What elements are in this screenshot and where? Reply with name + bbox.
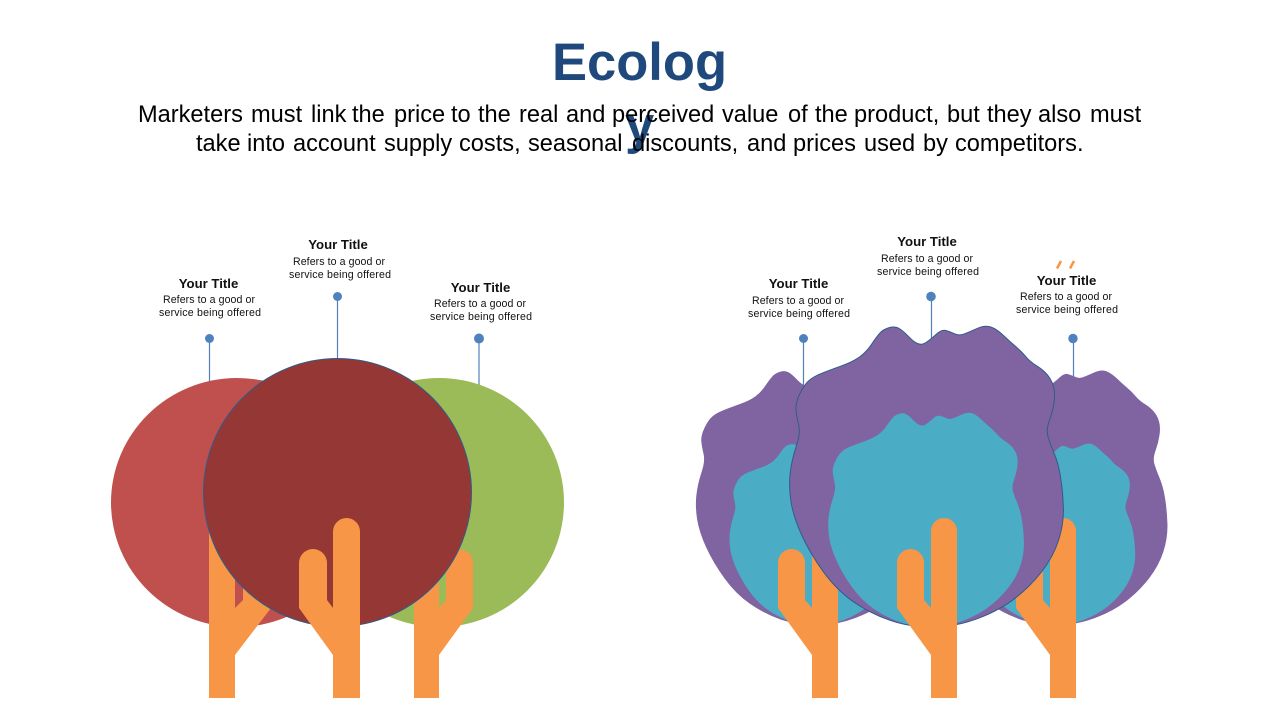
label: left round tree: Your Title — [179, 276, 238, 291]
label: right round tree — [430, 280, 532, 323]
intro text: by — [923, 131, 948, 157]
title: Ecolog — [552, 33, 727, 92]
label: right leafy tree: service being offered — [1016, 304, 1118, 316]
intro text: value — [722, 102, 778, 128]
callout line and dot: center leafy tree — [926, 292, 936, 340]
label: center round tree: Refers to a good or — [293, 256, 385, 268]
label: left leafy tree: Your Title — [769, 276, 828, 291]
title: y — [625, 96, 654, 155]
intro text: but — [947, 102, 980, 128]
right leafy crown — [936, 370, 1167, 625]
label: center leafy tree: Refers to a good or — [881, 253, 973, 265]
intro text: real — [519, 102, 558, 128]
left leafy crown — [696, 370, 928, 625]
label: left round tree: service being offered — [159, 307, 261, 319]
intro text: to — [451, 102, 471, 128]
label: right round tree: service being offered — [430, 311, 532, 323]
panel: leafy trees — [696, 234, 1167, 698]
callout line and dot: left round tree — [205, 334, 214, 382]
intro text: must — [251, 102, 303, 128]
label: right round tree: Refers to a good or — [434, 298, 526, 310]
green tree crown — [314, 378, 564, 627]
intro text: and — [566, 102, 605, 128]
dark red center crown — [204, 358, 472, 626]
intro text: account — [293, 131, 376, 157]
intro text: Marketers — [138, 102, 243, 128]
label: left round tree: Refers to a good or — [163, 294, 255, 306]
right trunk — [414, 518, 473, 698]
intro text: they — [987, 102, 1032, 128]
intro text: into — [247, 131, 285, 157]
intro text: perceived — [612, 102, 714, 128]
callout line and dot: right leafy tree — [1068, 334, 1078, 378]
intro text: supply — [384, 131, 452, 157]
left trunk — [209, 518, 271, 698]
label: center leafy tree: service being offered — [877, 266, 979, 278]
left leafy trunk — [778, 518, 838, 698]
intro text: seasonal — [528, 131, 622, 157]
intro text: also — [1038, 102, 1081, 128]
callout line and dot: left leafy tree — [799, 334, 808, 387]
panel: round trees — [111, 237, 564, 698]
intro text: used — [864, 131, 915, 157]
label: right leafy tree — [1016, 273, 1118, 316]
label: right leafy tree: Your Title — [1037, 273, 1096, 288]
intro text — [138, 102, 1142, 157]
callout line and dot: center round tree — [333, 292, 342, 360]
intro text: the — [352, 102, 385, 128]
label: center round tree: service being offered — [289, 269, 391, 281]
intro text: prices — [793, 131, 856, 157]
callout line and dot: right round tree — [474, 334, 484, 388]
red tree crown — [111, 378, 363, 627]
right leafy trunk — [1016, 518, 1076, 698]
intro text: of — [788, 102, 808, 128]
label: center leafy tree: Your Title — [897, 234, 957, 249]
intro text: costs, — [459, 131, 521, 157]
label: left leafy tree: Refers to a good or — [752, 295, 844, 307]
label: center round tree — [289, 237, 391, 281]
title — [552, 33, 727, 155]
intro text: product, — [854, 102, 939, 128]
intro text: take — [196, 131, 241, 157]
label: center leafy tree — [877, 234, 979, 278]
label: left round tree — [159, 276, 261, 319]
center leafy trunk — [897, 518, 957, 698]
intro text: link — [311, 102, 347, 128]
center leafy crown — [790, 326, 1063, 627]
orange tick marks — [1057, 261, 1074, 268]
intro text: must — [1090, 102, 1142, 128]
intro text: and — [747, 131, 786, 157]
center trunk — [299, 518, 360, 698]
label: right round tree: Your Title — [451, 280, 510, 295]
label: center round tree: Your Title — [308, 237, 368, 252]
intro text: the — [815, 102, 848, 128]
intro text: competitors. — [955, 131, 1084, 157]
label: right leafy tree: Refers to a good or — [1020, 291, 1112, 303]
label: left leafy tree: service being offered — [748, 308, 850, 320]
label: left leafy tree — [748, 276, 850, 320]
intro text: discounts, — [632, 131, 738, 157]
intro text: price — [394, 102, 445, 128]
intro text: the — [478, 102, 511, 128]
